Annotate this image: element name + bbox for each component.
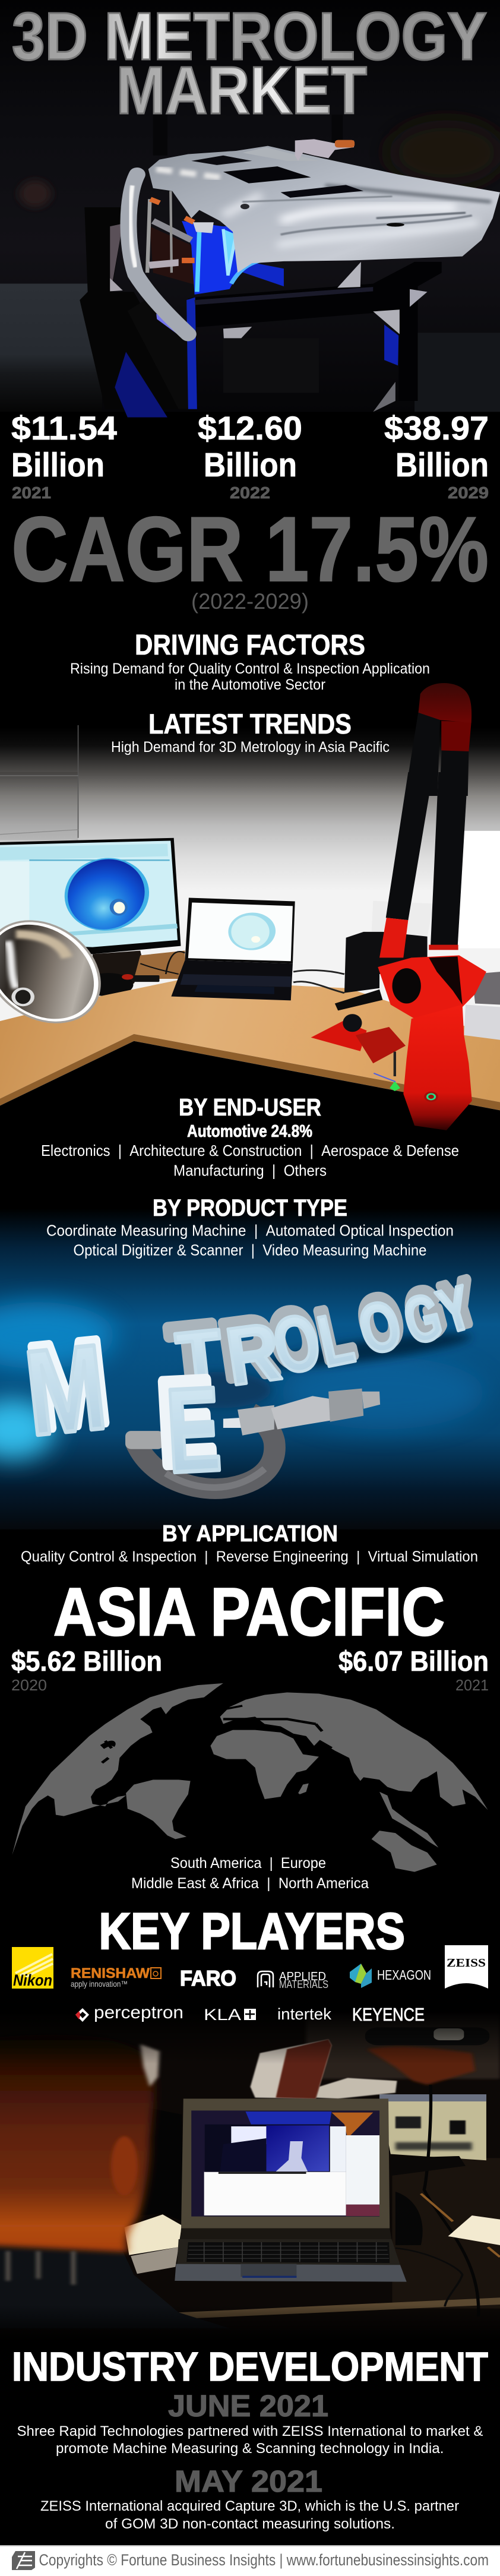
logo: Applied Materials: MATERIALS [279, 1978, 328, 1990]
by end-user segment [41, 1093, 459, 1180]
rear letters: TROLOGY: Y [431, 1273, 480, 1347]
rear letters: TROLOGY: L [311, 1291, 360, 1376]
rear letters: TROLOGY: O [351, 1285, 409, 1370]
logo: Renishaw: RENISHAW [71, 1965, 150, 1981]
logo: Perceptron: perceptron [94, 2003, 183, 2022]
latest trends: LATEST TRENDS [148, 708, 352, 739]
driving factors: Rising Demand for Quality Control & Inspection Application [70, 660, 430, 677]
development: May 2021: of GOM 3D non-contact measuring solutions. [105, 2516, 395, 2532]
driving factors: DRIVING FACTORS [135, 630, 365, 661]
rear letters: TROLOGY: T [172, 1312, 227, 1408]
rear letters: TROLOGY: G [397, 1279, 449, 1358]
CAGR period: (2022-2029) [191, 589, 309, 614]
rear letters: TROLOGY: L [311, 1297, 360, 1383]
logo: Zeiss: ZEISS [447, 1957, 486, 1970]
logo: FARO: FARO [180, 1966, 236, 1990]
by application: BY APPLICATION [162, 1521, 338, 1547]
metrology 3D letters and micrometer photo [0, 1209, 500, 1529]
market value 2021: $11.54 [11, 409, 117, 447]
other regions: South America | Europe [170, 1855, 326, 1872]
by application [21, 1521, 478, 1565]
logo: Hexagon: HEXAGON [377, 1967, 431, 1983]
development: June 2021: JUNE 2021 [168, 2389, 328, 2423]
by product type: Optical Digitizer & Scanner | Video Measuring Machine [74, 1241, 426, 1259]
by end-user segment: Electronics | Architecture & Construction | Aerospace & Defense [41, 1142, 459, 1159]
asia pacific 2020 value [11, 1645, 162, 1694]
asia pacific 2020 value: $5.62 Billion [11, 1645, 162, 1677]
market value 2021: 2021 [12, 483, 51, 502]
development: June 2021 [17, 2389, 483, 2457]
logo: KLA: KLA [204, 2006, 241, 2024]
market value 2029: 2029 [448, 483, 489, 502]
market value 2021: Billion [11, 446, 105, 484]
title: MARKET [116, 53, 367, 128]
asia pacific 2021 value: $6.07 Billion [338, 1645, 489, 1677]
australia [372, 1831, 437, 1872]
front letters: M E [19, 1314, 224, 1498]
market value 2029 [384, 409, 489, 502]
africa [210, 1730, 319, 1799]
latest trends: High Demand for 3D Metrology in Asia Pacific [111, 739, 390, 756]
development: May 2021: MAY 2021 [175, 2464, 322, 2498]
market value 2022: 2022 [230, 483, 270, 502]
driving factors [70, 630, 430, 693]
south america [126, 1780, 191, 1839]
rear letters: TROLOGY: O [265, 1296, 328, 1392]
asia pacific 2021 value: 2021 [455, 1676, 489, 1694]
development: June 2021: promote Machine Measuring & Scanning technology in India. [56, 2441, 444, 2457]
development: June 2021: Shree Rapid Technologies partnered with ZEISS International to market & [17, 2423, 483, 2439]
by end-user segment: BY END-USER [179, 1093, 321, 1121]
logo: Keyence: KEYENCE [352, 2004, 425, 2025]
asia pacific 2020 value: 2020 [11, 1676, 47, 1694]
key players heading: KEY PLAYERS [99, 1903, 405, 1960]
logo: Zeiss [445, 1945, 488, 1989]
title [12, 0, 487, 128]
market value 2029: $38.97 [384, 409, 489, 447]
rear letters: TROLOGY: R [215, 1299, 281, 1397]
logo: Nikon [12, 1947, 53, 1989]
market value 2022: Billion [204, 446, 297, 484]
by end-user segment: Automotive 24.8% [187, 1122, 312, 1141]
market value 2029: Billion [395, 446, 489, 484]
southeast asia islands [379, 1792, 438, 1848]
asia pacific 2021 value [338, 1645, 489, 1694]
rear letters: TROLOGY: O [262, 1290, 325, 1385]
logo: Hexagon [350, 1964, 431, 1988]
market value 2021 [11, 409, 117, 502]
footer bar [0, 2545, 500, 2576]
rear letters: TROLOGY: R [220, 1306, 286, 1403]
front letters: M E: M [23, 1314, 115, 1455]
icon: Fortune Business Insights logo [12, 2551, 35, 2570]
market value 2022 [198, 409, 302, 502]
front letters: M E: M [19, 1318, 112, 1461]
hero photo: car door on inspection fixture [0, 0, 500, 418]
logo: Applied Materials: APPLIED [279, 1970, 326, 1983]
north america [12, 1683, 223, 1855]
development: May 2021 [40, 2464, 459, 2532]
development: May 2021: ZEISS International acquired Capture 3D, which is the U.S. partner [40, 2498, 459, 2514]
logo: KLA [204, 2006, 256, 2024]
measuring arm upper section [405, 683, 471, 796]
rear letters: TROLOGY: G [399, 1273, 452, 1352]
logo: Applied Materials [258, 1970, 328, 1990]
asia pacific heading: ASIA PACIFIC [53, 1575, 445, 1650]
other regions: Middle East & Africa | North America [131, 1875, 369, 1892]
market value 2022: $12.60 [198, 409, 302, 447]
front letters: M E: E [155, 1354, 218, 1490]
rear letters: TROLOGY: O [352, 1279, 410, 1364]
by application: Quality Control & Inspection | Reverse Engineering | Virtual Simulation [21, 1548, 478, 1565]
driving factors: in the Automotive Sector [175, 677, 325, 693]
world map globe [12, 1683, 488, 1872]
other regions [131, 1855, 369, 1892]
logo: Intertek: intertek [277, 2005, 332, 2023]
logo: Nikon: Nikon [13, 1971, 52, 1989]
desk photo: measuring arm, monitor and laptop [0, 683, 500, 1157]
eurasia [220, 1692, 488, 1810]
rear letters: TROLOGY [165, 1267, 485, 1408]
rear letters: TROLOGY: Y [435, 1267, 485, 1341]
by end-user segment: Manufacturing | Others [173, 1162, 327, 1180]
logo: Renishaw: apply innovation™ [71, 1979, 128, 1989]
rear letters: TROLOGY: T [165, 1306, 221, 1402]
latest trends [111, 708, 390, 756]
micrometer frame [135, 1412, 275, 1488]
by product type: BY PRODUCT TYPE [153, 1195, 347, 1221]
front letters: M E: E [163, 1362, 224, 1498]
laptop photo: person scanning [0, 2011, 500, 2341]
by product type: Coordinate Measuring Machine | Automated Optical Inspection [46, 1221, 454, 1239]
logo: Renishaw [71, 1965, 161, 1989]
by product type [46, 1195, 454, 1259]
madagascar [298, 1783, 309, 1794]
